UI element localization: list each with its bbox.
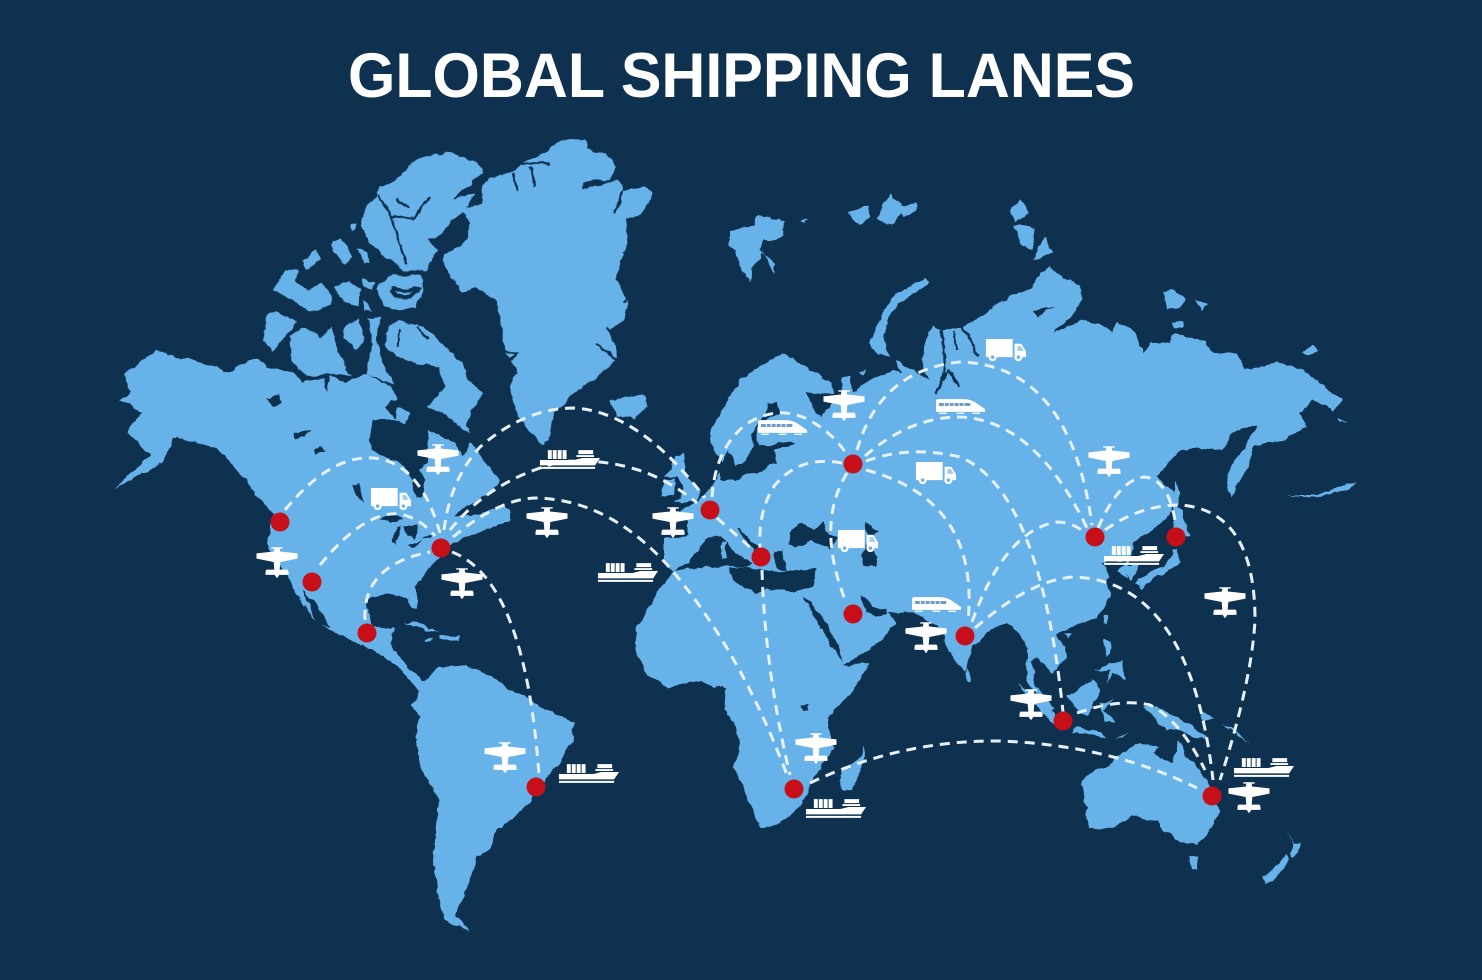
route: Durban to Sydney — [810, 741, 1197, 788]
port markers — [270, 454, 1222, 806]
route: Moscow to Jakarta — [866, 452, 1063, 712]
route: New York to Rotterdam — [450, 461, 697, 530]
world map — [115, 138, 1357, 932]
route: Mumbai to Shanghai — [972, 522, 1084, 622]
route: Seattle to New York — [285, 458, 440, 533]
route: Shanghai to Sydney — [1105, 505, 1255, 780]
ship icons — [540, 450, 1294, 818]
route: Los Angeles to New York — [320, 514, 435, 565]
land: Arctic Canada, Greenland and Iceland — [264, 138, 653, 445]
land: North America — [115, 350, 512, 692]
land: British Isles — [662, 455, 700, 503]
route: Moscow to Mediterranean — [760, 461, 842, 548]
route: Mumbai to Sydney — [975, 577, 1213, 780]
route: Mexico to New York — [365, 552, 430, 620]
title: GLOBAL SHIPPING LANES — [348, 41, 1135, 111]
truck icons — [371, 339, 1026, 552]
route: Moscow to Shanghai — [865, 417, 1087, 528]
land: Northern Europe, Baltic and Arctic islands — [663, 193, 978, 480]
land: South America — [412, 665, 574, 932]
route: Mediterranean to Durban — [762, 570, 790, 775]
route: Moscow to Shanghai north — [857, 362, 1092, 525]
land: Eurasia and Africa — [635, 267, 1343, 829]
route: Moscow to Mumbai — [866, 470, 969, 622]
land: Siberian islands and Kamchatka detail — [1010, 199, 1357, 497]
route: Moscow to Dubai — [831, 473, 847, 602]
route: Rotterdam to Mediterranean — [717, 518, 752, 549]
route: Rotterdam to Moscow — [712, 413, 846, 497]
shipping lane routes — [285, 362, 1255, 788]
route: New York to Santos — [452, 552, 539, 775]
land: Great Lakes — [267, 395, 433, 547]
land: Caribbean and Newfoundland — [403, 507, 512, 642]
train icons — [758, 399, 985, 612]
land: Mediterranean, Black Sea, Red Sea and Persian Gulf — [673, 522, 972, 792]
land: Japan, Southeast Asia and Oceania — [1018, 480, 1302, 883]
route: New York to Rotterdam north — [444, 408, 705, 530]
plane icons — [256, 390, 1270, 813]
route: New York to Durban — [453, 498, 787, 775]
route: Shanghai to Tokyo — [1098, 477, 1176, 528]
route: Jakarta to Sydney — [1077, 703, 1205, 770]
